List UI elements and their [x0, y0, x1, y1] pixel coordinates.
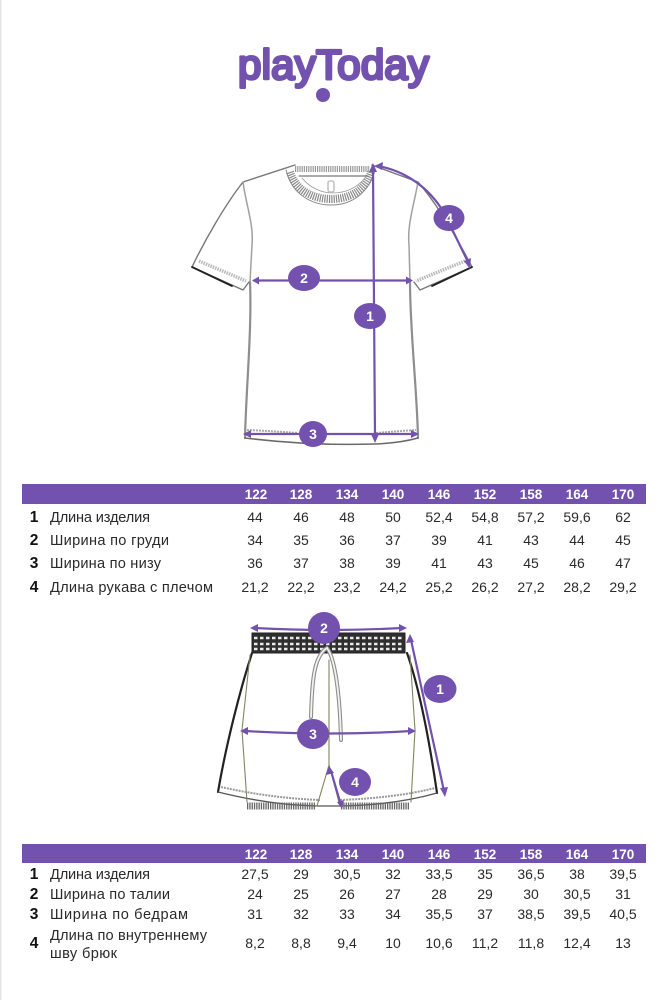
table 2 row 1: 35 [477, 866, 493, 882]
table 2 row 3 [30, 906, 637, 923]
table 1 header [22, 484, 646, 504]
table 2 row 2: Ширина по талии [50, 887, 170, 903]
table 2 row 1: 33,5 [425, 866, 453, 882]
hem stitching [247, 430, 416, 433]
table 1 row 3: 45 [523, 555, 539, 571]
table 2 row 2: 27 [385, 886, 401, 902]
table 2 row 2: 25 [293, 886, 309, 902]
table 2 row 1: 32 [385, 866, 401, 882]
table 2 row 3: 37 [477, 906, 493, 922]
table 2 row 4: шву брюк [50, 946, 118, 962]
table 2 row 4: 8,2 [245, 935, 265, 951]
table 1 header: 146 [428, 487, 451, 502]
table 1 row 1: 52,4 [425, 509, 453, 525]
t-shirt body outline [245, 282, 418, 438]
table 2 row 1: 1 [30, 866, 39, 883]
table 2 row 4: Длина по внутреннему [50, 928, 208, 944]
elastic waistband [252, 633, 405, 653]
table 2 header: 164 [566, 847, 589, 862]
table 2 row 4: 10,6 [425, 935, 453, 951]
table 2 header: 170 [612, 847, 634, 862]
table 2 row 3: 40,5 [609, 906, 637, 922]
t-shirt measurement 1: length: 1 [366, 308, 374, 324]
table 1 row 2: 45 [615, 532, 631, 548]
table 1 header: 140 [382, 487, 404, 502]
table 2 row 1: Длина изделия [50, 867, 150, 883]
table 2 row 3: 3 [30, 906, 39, 923]
table 2 row 3: Ширина по бедрам [50, 907, 188, 923]
table 1 row 4: 23,2 [333, 579, 361, 595]
table 1 row 3: Ширина по низу [50, 556, 162, 572]
table 2 row 2: 31 [615, 886, 631, 902]
table 1 row 2: 35 [293, 532, 309, 548]
table 2 header: 146 [428, 847, 451, 862]
table 2 row 4: 11,2 [472, 935, 498, 951]
table 1 row 1: 57,2 [517, 509, 545, 525]
table 2 row 4: 4 [30, 935, 39, 952]
shorts measurement 2: waist: 2 [320, 620, 328, 636]
table 1 header: 128 [290, 487, 313, 502]
table 1 header: 158 [520, 487, 543, 502]
table 2 row 3: 38,5 [517, 906, 545, 922]
table 2 row 4: 13 [615, 935, 631, 951]
table 2 row 3: 31 [247, 906, 263, 922]
shorts liner hems [247, 802, 410, 810]
table 2 row 1: 29 [293, 866, 309, 882]
table 1: t-shirt sizes [22, 484, 646, 596]
table 1 row 2: 41 [477, 532, 493, 548]
table 1 row 4: 22,2 [287, 579, 315, 595]
table 1 row 3: 43 [477, 555, 493, 571]
table 2 row 1: 39,5 [609, 866, 637, 882]
table 1 row 1: 48 [339, 509, 355, 525]
table 1 row 2: 39 [431, 532, 447, 548]
table 1 row 3: 47 [615, 555, 631, 571]
table 1 row 1: 59,6 [563, 509, 591, 525]
table 1 row 2: 36 [339, 532, 355, 548]
table 1 row 4: 29,2 [609, 579, 637, 595]
table 1 row 4: 26,2 [471, 579, 499, 595]
table 2 row 1 [30, 866, 637, 883]
table 2 row 4: 11,8 [518, 935, 544, 951]
shorts measurement 4: inseam [326, 766, 371, 809]
table 2 row 4: 10 [385, 935, 401, 951]
table 2 row 3: 39,5 [563, 906, 591, 922]
table 2 header [22, 844, 646, 863]
table 2 row 3: 32 [293, 906, 309, 922]
table 2 header: 158 [520, 847, 543, 862]
table 2 row 2 [30, 886, 631, 903]
table 2 row 4 [30, 928, 631, 962]
table 1 row 4: 24,2 [379, 579, 407, 595]
table 1 row 4: 28,2 [563, 579, 591, 595]
t-shirt measurement 2: chest: 2 [300, 270, 308, 286]
table 2 row 3: 34 [385, 906, 401, 922]
table 1 row 3: 41 [431, 555, 447, 571]
table 1 row 1: 46 [293, 509, 309, 525]
table 2 row 2: 30,5 [563, 886, 591, 902]
table 2 row 3: 33 [339, 906, 355, 922]
table 1 row 1: 1 [30, 509, 39, 526]
t-shirt measurement 3: hem width [243, 421, 419, 447]
shorts measurement 2: waist [250, 612, 407, 644]
table 2: shorts sizes [22, 844, 646, 962]
table 2 row 1: 36,5 [517, 866, 545, 882]
table 1 header: 152 [474, 487, 496, 502]
table 2 row 4: 8,8 [291, 935, 311, 951]
table 1 row 1: 44 [247, 509, 263, 525]
table 2 row 2: 24 [247, 886, 263, 902]
shorts hem stitching [221, 787, 435, 800]
logo: playToday: playToday [238, 41, 429, 88]
table 2 header: 134 [336, 847, 359, 862]
table 2 row 1: 27,5 [241, 866, 269, 882]
table 1 row 3: 38 [339, 555, 355, 571]
table 1 row 1: 54,8 [471, 509, 499, 525]
table 1 header: 122 [245, 487, 267, 502]
t-shirt measurement 3: hem width: 3 [309, 426, 317, 442]
table 1 row 1: Длина изделия [50, 510, 150, 526]
table 1 row 3: 36 [247, 555, 263, 571]
table 2 row 1: 38 [569, 866, 585, 882]
shorts measurement 4: inseam: 4 [351, 774, 359, 790]
table 2 row 2: 30 [523, 886, 539, 902]
table 1 row 3: 3 [30, 555, 39, 572]
table 1 row 4: 27,2 [517, 579, 545, 595]
table 1 row 4: Длина рукава с плечом [50, 580, 213, 596]
table 1 row 2: 34 [247, 532, 263, 548]
table 1 header: 134 [336, 487, 359, 502]
table 2 row 2: 2 [30, 886, 38, 903]
table 2 header: 128 [290, 847, 313, 862]
table 1 row 3 [30, 555, 631, 572]
table 1 row 2: 43 [523, 532, 539, 548]
t-shirt technical drawing [192, 165, 472, 444]
table 1 row 3: 39 [385, 555, 401, 571]
table 2 row 2: 29 [477, 886, 493, 902]
table 2 row 2: 28 [431, 886, 447, 902]
table 2 row 1: 30,5 [333, 866, 361, 882]
table 1 row 2: 37 [385, 532, 401, 548]
table 1 row 3: 46 [569, 555, 585, 571]
sleeve hems [199, 261, 465, 281]
table 1 row 3: 37 [293, 555, 309, 571]
t-shirt shoulders and sleeves [192, 165, 472, 290]
collar rib [290, 172, 371, 199]
shorts measurement 3: hips: 3 [309, 726, 317, 742]
t-shirt measurement 4: sleeve: 4 [445, 210, 453, 226]
table 1 row 1: 50 [385, 509, 401, 525]
table 2 row 2: 26 [339, 886, 355, 902]
table 2 row 4: 9,4 [337, 935, 357, 951]
shorts outer outline [218, 653, 437, 793]
shorts measurement 1: length: 1 [436, 681, 444, 697]
table 1 row 4: 4 [30, 579, 39, 596]
table 1 header: 164 [566, 487, 589, 502]
table 1 row 4: 21,2 [241, 579, 269, 595]
t-shirt measurement 1: length [354, 163, 386, 443]
table 1 row 2 [30, 532, 631, 549]
table 2 row 3: 35,5 [425, 906, 453, 922]
table 1 row 4: 25,2 [425, 579, 453, 595]
table 1 row 2: 44 [569, 532, 585, 548]
table 1 row 2: 2 [30, 532, 38, 549]
drawstring [311, 648, 341, 740]
t-shirt measurement 4: sleeve [374, 162, 471, 269]
table 1 row 1 [30, 509, 631, 526]
table 2 header: 140 [382, 847, 404, 862]
table 1 row 1: 62 [615, 509, 631, 525]
table 1 header: 170 [612, 487, 634, 502]
shorts measurement 1: length [406, 634, 456, 797]
shorts measurement 3: hips [240, 719, 416, 749]
neck label loop [328, 181, 334, 192]
t-shirt measurement 2: chest [252, 265, 413, 291]
table 2 header: 122 [245, 847, 267, 862]
table 1 row 4 [30, 579, 637, 596]
shorts liner seams [242, 655, 415, 806]
table 1 row 2: Ширина по груди [50, 533, 169, 549]
shorts technical drawing [218, 633, 437, 806]
table 2 row 4: 12,4 [563, 935, 591, 951]
table 2 header: 152 [474, 847, 496, 862]
